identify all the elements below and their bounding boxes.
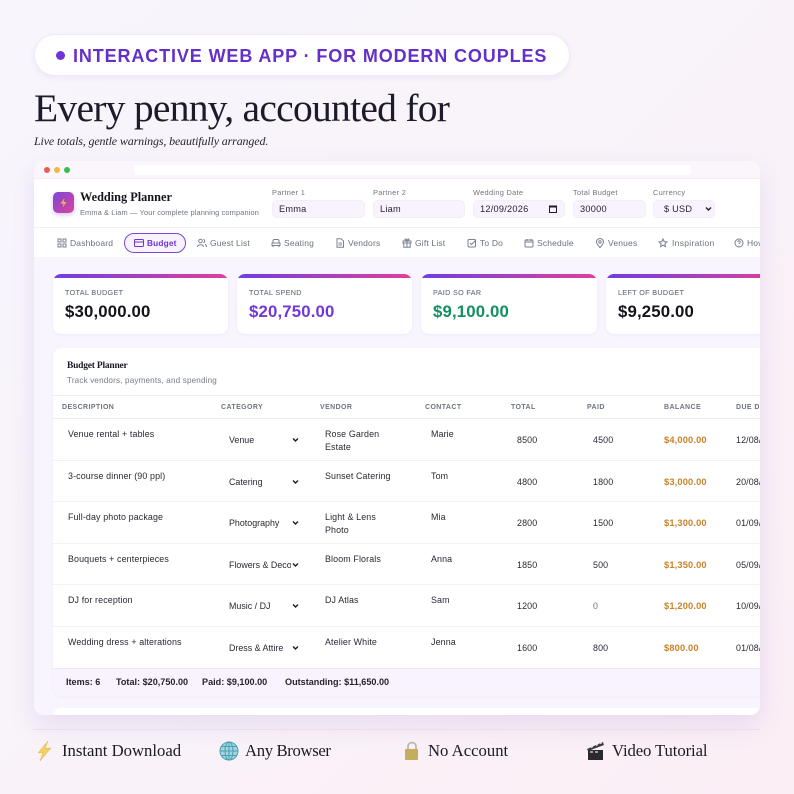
input: partner 2: Liam	[380, 204, 401, 214]
table row: venue	[53, 419, 760, 461]
table row: music: $1,200.00	[664, 600, 707, 610]
stat card: total budget: TOTAL BUDGET	[65, 288, 123, 296]
app tagline: Emma & Liam — Your complete planning companion	[80, 208, 259, 217]
table row: attire: Atelier White	[325, 637, 377, 647]
label: wedding date: Wedding Date	[473, 188, 523, 197]
table row: catering: 3-course dinner (90 ppl)	[68, 471, 165, 481]
table row: photography: Photo	[325, 525, 349, 535]
footer divider	[33, 729, 760, 730]
nav: seating: Seating	[284, 238, 314, 248]
input: partner 1: Emma	[279, 204, 307, 214]
table row: venue: $4,000.00	[664, 434, 707, 444]
browser title bar	[34, 161, 760, 179]
table row: photography: $1,300.00	[664, 518, 707, 528]
table row: attire	[68, 637, 760, 653]
table row: music: 0	[593, 601, 598, 611]
label: partner 1: Partner 1	[272, 188, 305, 197]
badge pill	[34, 34, 570, 76]
label: total budget: Total Budget	[573, 188, 618, 197]
app logo	[53, 192, 74, 213]
table row: attire: 800	[593, 643, 608, 653]
feature: instant download: Instant Download	[62, 741, 181, 760]
header: category: CATEGORY	[221, 404, 263, 411]
panel heading: Budget Planner	[67, 360, 128, 370]
header: contact: CONTACT	[425, 404, 462, 411]
table row: music: Sam	[431, 595, 450, 605]
table row: photography: Mia	[431, 512, 446, 522]
table row: catering: 4800	[517, 477, 537, 487]
table row: venue: Marie	[431, 429, 454, 439]
table row: catering: $3,000.00	[664, 476, 707, 486]
header: paid: PAID	[587, 404, 605, 411]
table row: photography: Photography	[229, 518, 279, 528]
nav: dashboard: Dashboard	[70, 238, 113, 248]
header: vendor: VENDOR	[320, 404, 352, 411]
feature: video tutorial: Video Tutorial	[612, 741, 707, 760]
table row: photography: 2800	[517, 518, 537, 528]
stat card: total spend	[237, 274, 412, 334]
table row: catering: Sunset Catering	[325, 471, 391, 481]
table row: venue: Venue rental + tables	[68, 429, 154, 439]
table row: music: DJ for reception	[68, 595, 133, 605]
subtitle: Live totals, gentle warnings, beautifully arranged.	[34, 134, 268, 148]
stat card: paid so far: PAID SO FAR	[433, 288, 481, 296]
label: currency: Currency	[653, 188, 685, 197]
table totals bar: Paid: $9,100.00	[202, 677, 267, 687]
nav: to do: To Do	[480, 238, 503, 248]
stat card: total budget	[53, 274, 228, 334]
select: currency	[653, 200, 715, 218]
header: balance: BALANCE	[664, 404, 701, 411]
navigation bar	[34, 228, 760, 257]
table row: music: Music / DJ	[229, 601, 270, 611]
window dots	[44, 167, 70, 173]
feature: any browser: Any Browser	[245, 741, 331, 760]
header: total: TOTAL	[511, 404, 536, 411]
table row: flowers: 1850	[517, 560, 537, 570]
stat card: total spend: TOTAL SPEND	[249, 288, 302, 296]
input: wedding date: 12/09/2026	[480, 204, 528, 214]
input: wedding date	[473, 200, 565, 218]
table row: photography	[53, 502, 760, 544]
nav: budget	[134, 238, 177, 248]
stat card: left of budget: $9,250.00	[618, 302, 694, 321]
input: total budget: 30000	[580, 204, 607, 214]
select: currency: $ USD	[664, 204, 692, 214]
badge dot	[56, 51, 65, 60]
table row: attire: 1600	[517, 643, 537, 653]
table row: venue: Estate	[325, 442, 351, 452]
stat card: left of budget	[606, 274, 782, 334]
feature: no account: No Account	[428, 741, 508, 760]
header: description: DESCRIPTION	[62, 404, 114, 411]
table row: attire: Dress & Attire	[229, 643, 283, 653]
input: partner 2	[373, 200, 465, 218]
budget active tab	[124, 233, 186, 253]
stat card: left of budget: LEFT OF BUDGET	[618, 288, 684, 296]
table totals bar: Total: $20,750.00	[116, 677, 188, 687]
table row: attire: $800.00	[664, 642, 699, 652]
nav: to do	[468, 238, 503, 248]
table row: music: DJ Atlas	[325, 595, 359, 605]
table row: photography: Full-day photo package	[68, 512, 163, 522]
nav: guest list: Guest List	[210, 238, 250, 248]
table header	[53, 395, 760, 419]
table row: photography: 1500	[593, 518, 613, 528]
nav: gift list: Gift List	[415, 238, 445, 248]
next panel peek	[53, 708, 783, 728]
app name: Wedding Planner	[80, 190, 172, 204]
nav: schedule: Schedule	[537, 238, 574, 248]
table row: attire: Jenna	[431, 637, 456, 647]
stat card: total budget: $30,000.00	[65, 302, 150, 321]
nav: inspiration: Inspiration	[672, 238, 715, 248]
app header	[34, 179, 760, 228]
title: Every penny, accounted for	[34, 86, 449, 130]
table row: attire: Wedding dress + alterations	[68, 637, 182, 647]
stat card: paid so far: $9,100.00	[433, 302, 509, 321]
nav: budget: Budget	[147, 238, 177, 248]
label: partner 2: Partner 2	[373, 188, 406, 197]
address bar	[134, 165, 691, 175]
table row: flowers: 500	[593, 560, 608, 570]
table row: venue: 8500	[517, 435, 537, 445]
table row: flowers: $1,350.00	[664, 560, 707, 570]
table totals bar: Outstanding: $11,650.00	[285, 677, 389, 687]
table row: venue: Venue	[229, 435, 254, 445]
panel description: Track vendors, payments, and spending	[67, 376, 217, 384]
table totals bar: Items: 6	[66, 677, 100, 687]
nav: vendors: Vendors	[348, 238, 380, 248]
table row: flowers	[53, 544, 760, 585]
table row: music: 1200	[517, 601, 537, 611]
stat card: total spend: $20,750.00	[249, 302, 334, 321]
nav: venues: Venues	[608, 238, 637, 248]
table row: venue: Rose Garden	[325, 429, 379, 439]
table row: catering: 1800	[593, 477, 613, 487]
table row: flowers: Bouquets + centerpieces	[68, 554, 169, 564]
app window	[34, 161, 760, 715]
table row: flowers: Bloom Florals	[325, 554, 381, 564]
table row: catering: Tom	[431, 471, 448, 481]
stat card: paid so far	[421, 274, 597, 334]
panel: budget planner	[53, 348, 783, 696]
table row: flowers: Anna	[431, 554, 452, 564]
nav: how to	[734, 238, 760, 248]
table row: catering: Catering	[229, 477, 263, 487]
table row: venue: 4500	[593, 435, 613, 445]
input: total budget	[573, 200, 646, 218]
table row: music	[53, 585, 760, 627]
table row: photography: Light & Lens	[325, 512, 376, 522]
input: partner 1	[272, 200, 365, 218]
table row: catering	[53, 461, 760, 502]
badge text: INTERACTIVE WEB APP · FOR MODERN COUPLES	[73, 46, 547, 66]
table totals bar	[53, 668, 783, 696]
